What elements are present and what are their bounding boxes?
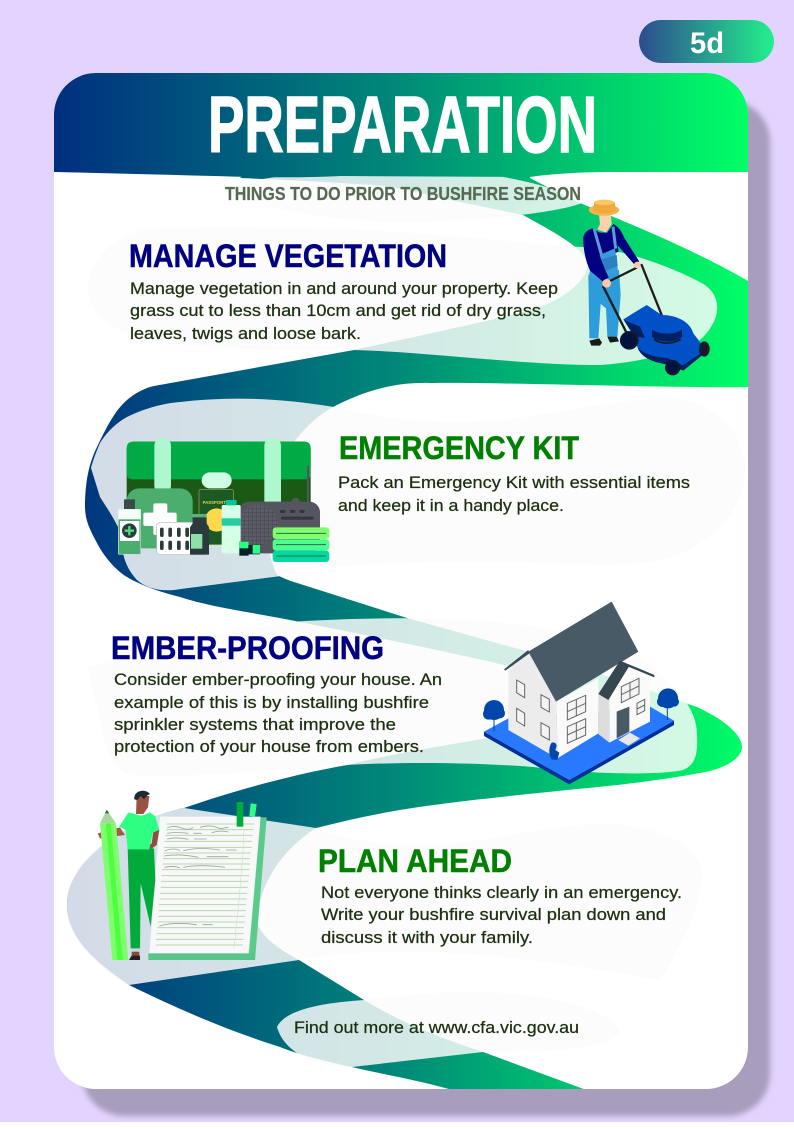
neck and face — [597, 212, 612, 233]
pencil — [100, 823, 128, 960]
left arm — [583, 228, 609, 281]
badge: 5d — [639, 20, 774, 63]
subtitle: THINGS TO DO PRIOR TO BUSHFIRE SEASON — [225, 184, 581, 204]
blob: manage vegetation — [87, 227, 717, 365]
text: manage vegetation — [130, 280, 558, 343]
text: emergency kit: and keep it in a handy place. — [338, 497, 564, 515]
text: plan ahead — [321, 884, 682, 947]
blob: ember-proofing — [87, 618, 697, 776]
text: emergency kit — [338, 474, 690, 515]
winding river band — [67, 170, 760, 1095]
text: ember-proofing: Consider ember-proofing your house. An — [114, 671, 442, 689]
text: plan ahead: Not everyone thinks clearly in an emergency. — [321, 884, 682, 902]
icon: house — [483, 602, 679, 784]
icon: man with lawn mower — [583, 200, 710, 375]
icon: emergency kit items: PASSPORT — [203, 500, 226, 505]
blob: emergency kit — [91, 398, 745, 590]
white card — [54, 73, 748, 1089]
badge: 5d: 5d — [690, 27, 724, 60]
trousers — [588, 270, 621, 338]
footer link text: Find out more at www.cfa.vic.gov.au — [294, 1019, 579, 1037]
text: ember-proofing: example of this is by installing bushfire — [114, 694, 429, 712]
text: ember-proofing: protection of your house from embers. — [114, 738, 424, 756]
straw hat — [589, 204, 619, 216]
mower body — [637, 337, 707, 371]
text: plan ahead: Write your bushfire survival plan down and — [321, 906, 666, 924]
text: manage vegetation: Manage vegetation in and around your property. Keep — [130, 280, 558, 298]
title: PREPARATION — [208, 80, 597, 169]
text: emergency kit: Pack an Emergency Kit with essential items — [338, 474, 690, 492]
handle — [603, 265, 662, 332]
shirt — [119, 812, 159, 849]
arm behind pencil — [98, 827, 125, 838]
heading: manage vegetation: MANAGE VEGETATION — [129, 238, 447, 274]
header band — [54, 73, 748, 177]
blob: plan ahead — [67, 808, 702, 985]
blob: find out more — [277, 992, 619, 1067]
torso — [592, 224, 619, 260]
icon: person with pencil and notepad — [98, 791, 267, 960]
text: manage vegetation: grass cut to less than 10cm and get rid of dry grass, — [130, 302, 546, 320]
text: ember-proofing: sprinkler systems that improve the — [114, 716, 396, 734]
trousers — [128, 848, 155, 948]
heading: ember-proofing: EMBER-PROOFING — [111, 630, 384, 666]
second arm — [144, 827, 159, 852]
text: manage vegetation: leaves, twigs and loose bark. — [130, 325, 361, 343]
text: plan ahead: discuss it with your family. — [321, 929, 533, 947]
boots — [589, 337, 619, 346]
heading: plan ahead: PLAN AHEAD — [318, 843, 512, 879]
heading: emergency kit: EMERGENCY KIT — [339, 430, 579, 466]
right arm — [613, 224, 639, 264]
blob: things to do — [221, 168, 582, 222]
bib — [588, 248, 618, 279]
head — [136, 796, 149, 814]
text: ember-proofing — [114, 671, 442, 756]
card shadow — [82, 100, 770, 1116]
icon: emergency kit items — [118, 437, 329, 562]
